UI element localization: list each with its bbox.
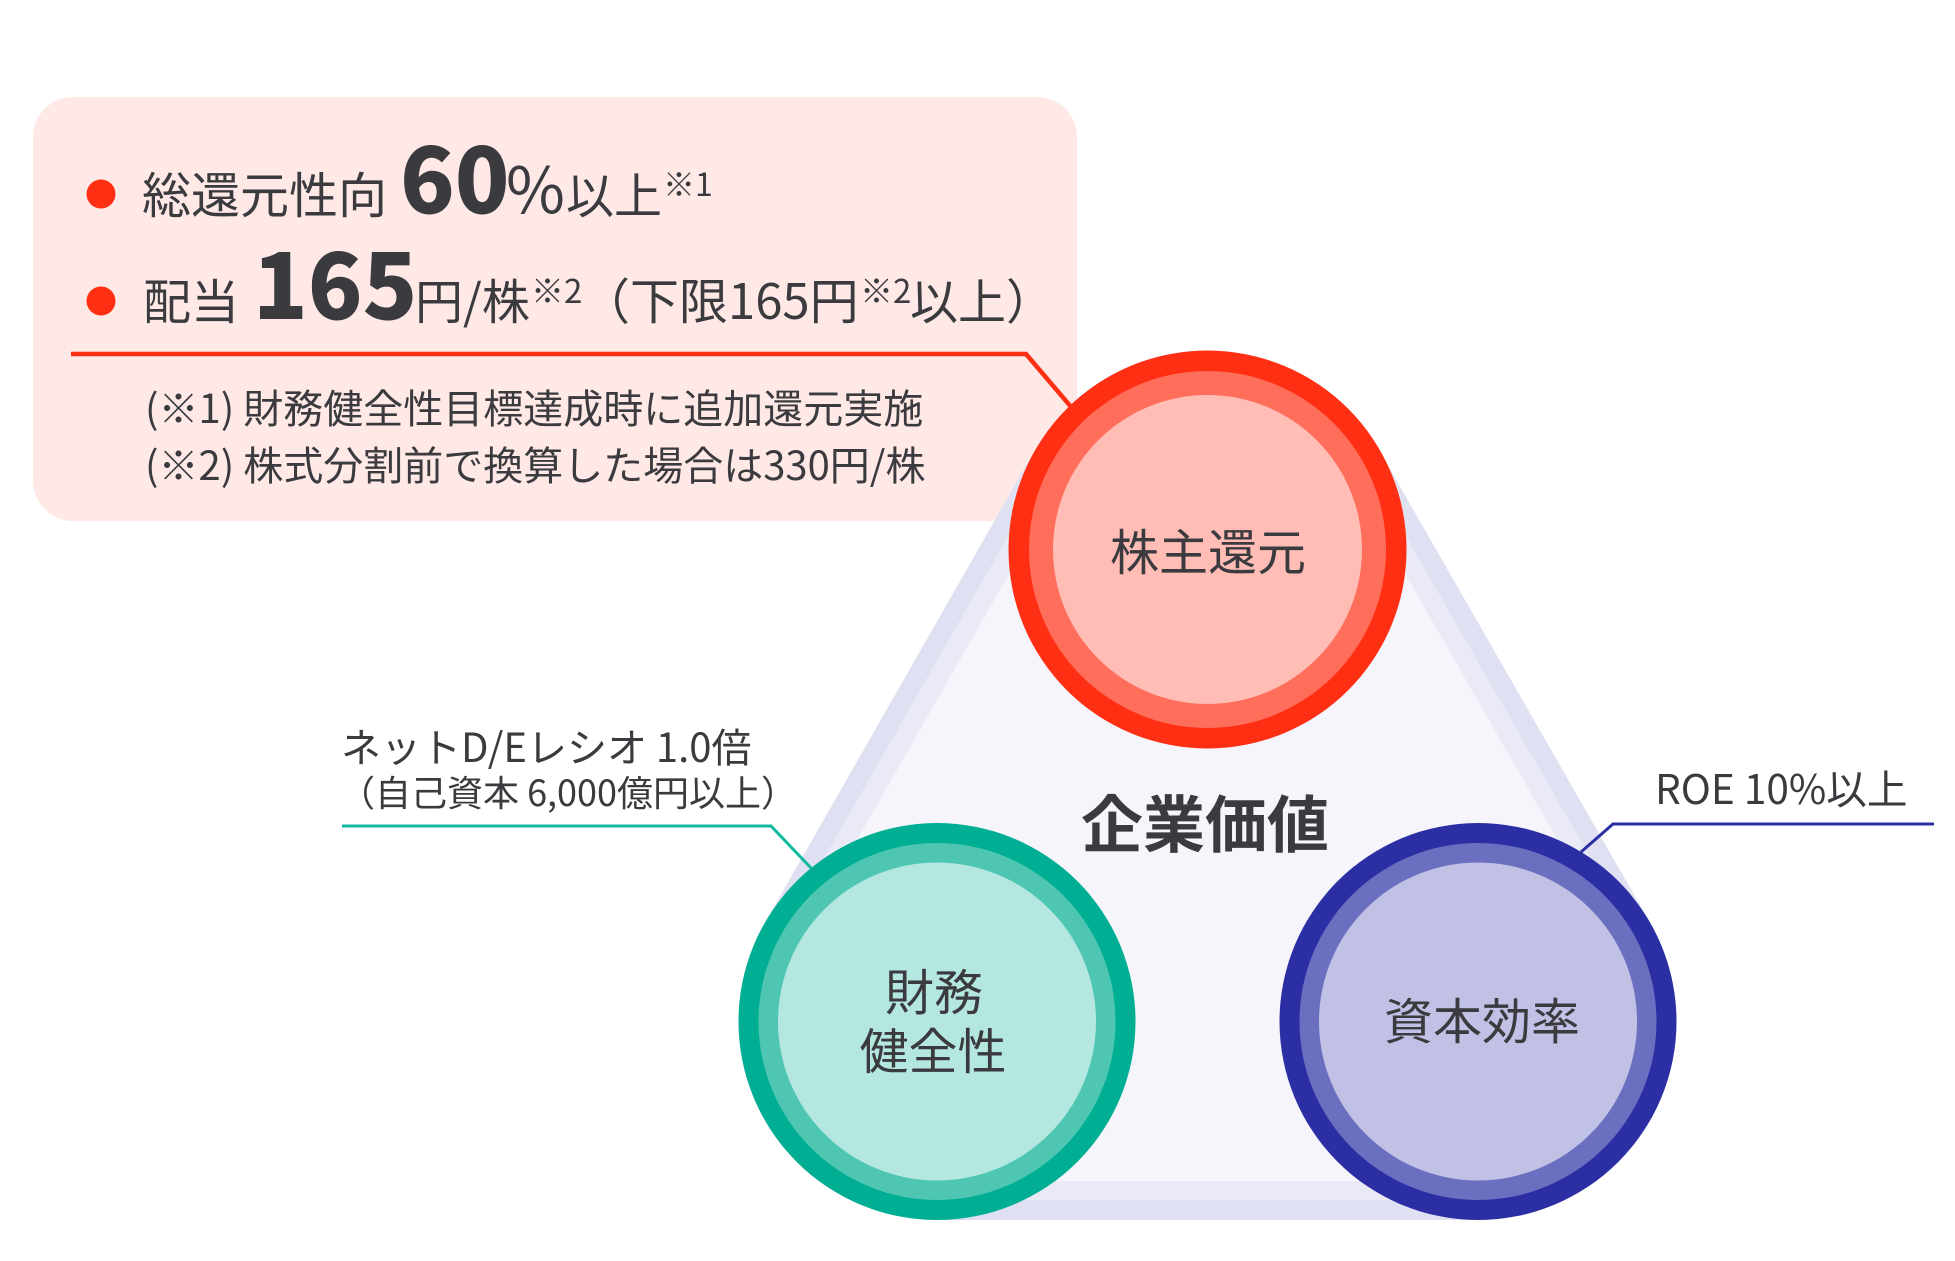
bullet: dividend (86, 286, 116, 316)
text: dividend per share: （下限165円 (581, 263, 859, 334)
callout: net D/E ratio: （自己資本 6,000億円以上） (339, 765, 797, 817)
leader line: shareholder return (71, 354, 1072, 408)
text: dividend per share: ※2 (860, 265, 911, 313)
text: total payout ratio: % (506, 140, 565, 232)
text: dividend per share: 以上） (910, 263, 1054, 333)
circle: capital efficiency (1280, 823, 1676, 1220)
note 1: (※1) 財務健全性目標達成時に追加還元実施 (145, 377, 923, 435)
circle: financial soundness: 財務 (885, 954, 983, 1025)
text: dividend per share: 円/株 (415, 263, 530, 333)
callout: net D/E ratio (339, 716, 811, 868)
circle: shareholder return: 株主還元 (1110, 514, 1306, 585)
triangle: corporate value background (937, 549, 1478, 1022)
heading: corporate value: 企業価値 (1081, 775, 1329, 865)
text: dividend per share: ※2 (531, 265, 582, 313)
circle: shareholder return (1008, 350, 1406, 748)
callout: ROE (1581, 757, 1934, 852)
text: total payout ratio: 総還元性向 (142, 157, 387, 228)
text: total payout ratio: 以上 (566, 157, 662, 227)
text: total payout ratio: 60 (400, 109, 510, 239)
text: dividend per share: 165 (253, 215, 417, 345)
circle: financial soundness: 健全性 (859, 1013, 1007, 1084)
panel text: shareholder return (71, 109, 1072, 492)
circle: financial soundness (738, 823, 1136, 1220)
text: total payout ratio: ※1 (663, 160, 713, 206)
bullet: payout ratio (86, 180, 116, 208)
callout: net D/E ratio: ネットD/Eレシオ 1.0倍 (341, 716, 751, 774)
callout: ROE: ROE 10%以上 (1655, 757, 1907, 816)
circle: capital efficiency: 資本効率 (1384, 983, 1580, 1054)
note 2: (※2) 株式分割前で換算した場合は330円/株 (145, 434, 925, 492)
text: dividend per share: 配当 (143, 263, 239, 333)
panel: shareholder return targets (33, 97, 1077, 521)
